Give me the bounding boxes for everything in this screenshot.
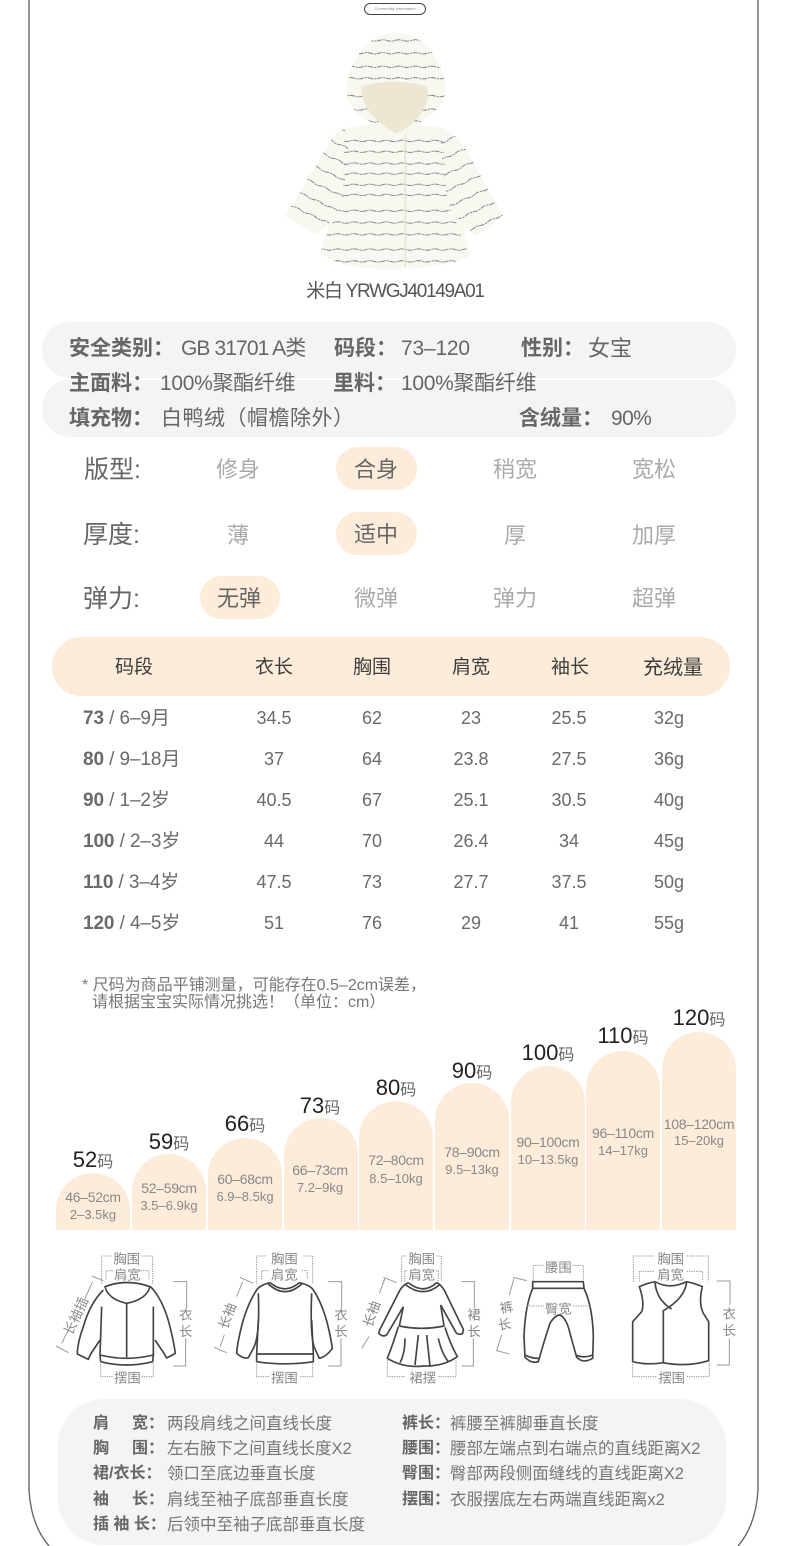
row 90: 25.1 <box>453 790 489 810</box>
arch 80 <box>359 1101 433 1230</box>
panel: measurement definitions <box>58 1399 726 1545</box>
spec: lining: 里料： <box>333 372 396 395</box>
weight 66: 6.9–8.5kg <box>216 1189 274 1204</box>
row 100: 26.4 <box>453 831 489 851</box>
diagram: dress: 肩宽 <box>408 1266 435 1282</box>
row 90: 40.5 <box>256 790 292 810</box>
diagram: pants: 腰围 <box>545 1260 572 1275</box>
table header: 袖长 <box>551 657 589 678</box>
size label 73: 73码 <box>300 1093 340 1118</box>
definition: waist: 腰部左端点到右端点的直线距离X2 <box>450 1440 700 1458</box>
diagrams: dress, pants and vest <box>360 1251 736 1385</box>
diagram: dress: 长 <box>467 1324 481 1339</box>
spec value: size range: 73–120 <box>401 337 470 360</box>
row 110: 110 / 3–4岁 <box>83 872 179 893</box>
definition: waist: 腰围： <box>402 1440 450 1457</box>
row 120: 29 <box>461 913 481 933</box>
diagram: vest: 肩宽 <box>657 1266 684 1282</box>
definition: sleeve: 肩线至袖子底部垂直长度 <box>167 1491 348 1509</box>
row 80: 36g <box>654 749 684 769</box>
diagram: hooded jacket: 长袖插 <box>61 1295 91 1337</box>
definition: chest: 胸 <box>93 1440 109 1457</box>
spec: gender: 性别： <box>521 337 584 360</box>
row 80: 80 / 9–18月 <box>83 749 180 770</box>
size label 59: 59码 <box>149 1129 189 1154</box>
diagram: dress: 裙摆 <box>409 1370 436 1385</box>
row 110: 47.5 <box>256 872 292 892</box>
size label 66: 66码 <box>225 1111 265 1136</box>
row 73: 23 <box>461 708 481 728</box>
weight 110: 14–17kg <box>598 1143 648 1158</box>
row 90: 40g <box>654 790 684 810</box>
definition: shoulder width: 肩 <box>93 1415 109 1432</box>
row 73 <box>83 708 684 729</box>
row 120: 41 <box>559 913 579 933</box>
row 80: 64 <box>362 749 382 769</box>
spec value: safety class: GB 31701 A类 <box>181 337 305 360</box>
option: 超弹 <box>632 586 676 611</box>
row 110: 37.5 <box>551 872 587 892</box>
option selected: 合身 <box>354 457 398 482</box>
spec: shell fabric: 主面料： <box>69 372 153 395</box>
row 100: 34 <box>559 831 579 851</box>
diagram: hooded jacket: 肩宽 <box>114 1266 141 1282</box>
arch 90 <box>435 1083 509 1230</box>
spec value: gender: 女宝 <box>588 336 632 361</box>
definition: shoulder width: 两段肩线之间直线长度 <box>167 1415 332 1433</box>
row 120: 120 / 4–5岁 <box>83 913 180 934</box>
option: 稍宽 <box>493 457 537 482</box>
diagram: pants <box>497 1260 593 1362</box>
weight 52: 2–3.5kg <box>70 1207 116 1222</box>
row 120 <box>83 913 684 934</box>
weight 73: 7.2–9kg <box>297 1180 343 1195</box>
spec: size range: 码段： <box>334 337 397 360</box>
table header: 码段 <box>115 657 153 678</box>
row 73: 34.5 <box>256 708 292 728</box>
arch 59 <box>132 1154 206 1230</box>
diagram: pants: 长 <box>497 1316 512 1333</box>
range 80: 72–80cm <box>368 1152 424 1168</box>
diagram: sweater: 长 <box>334 1324 348 1339</box>
diagram: sweater: 胸围 <box>271 1251 298 1266</box>
chart: size arches by height and weight <box>56 1005 736 1230</box>
highlight: fit <box>336 447 417 490</box>
arch 66 <box>208 1138 282 1230</box>
range 73: 66–73cm <box>292 1162 348 1178</box>
definition: length: 领口至底边垂直长度 <box>167 1465 316 1483</box>
diagrams: hooded jacket and sweater <box>56 1251 348 1385</box>
option: 宽松 <box>632 457 676 482</box>
panel: product specs <box>42 322 736 437</box>
size label 120: 120码 <box>673 1005 725 1030</box>
row 73: 62 <box>362 708 382 728</box>
panel: fit ratings <box>83 447 676 619</box>
product image: hooded jacket <box>286 33 503 269</box>
size label 100: 100码 <box>522 1040 574 1065</box>
arch 120 <box>662 1032 736 1230</box>
definition: sleeve <box>93 1490 348 1509</box>
row 110: 50g <box>654 872 684 892</box>
arch 52 <box>56 1173 130 1230</box>
option: 微弹 <box>354 586 398 611</box>
row background bottom <box>42 380 736 437</box>
weight 80: 8.5–10kg <box>369 1171 423 1186</box>
row 100: 100 / 2–3岁 <box>83 831 180 852</box>
highlight: thickness <box>336 512 417 555</box>
row 110: 73 <box>362 872 382 892</box>
option: 薄 <box>227 523 249 548</box>
diagram: sweater: 摆围 <box>271 1370 298 1385</box>
definition: sleeve: 长： <box>132 1491 164 1508</box>
diagram: dress: 裙 <box>467 1307 481 1322</box>
range 66: 60–68cm <box>217 1171 273 1187</box>
label: thickness: 厚度: <box>83 521 140 549</box>
option: 修身 <box>216 457 260 482</box>
table header: 胸围 <box>353 657 391 678</box>
row 80: 23.8 <box>453 749 489 769</box>
row 90: 90 / 1–2岁 <box>83 790 170 811</box>
definition: pants length: 裤长： <box>402 1415 450 1432</box>
diagram: vest: 衣 <box>723 1306 736 1321</box>
definition: chest: 左右腋下之间直线长度X2 <box>167 1440 352 1458</box>
row 110 <box>83 872 684 893</box>
row 100: 45g <box>654 831 684 851</box>
size table rows <box>83 708 684 934</box>
row 90: 67 <box>362 790 382 810</box>
definition: hem: 衣服摆底左右两端直线距离x2 <box>450 1491 665 1509</box>
measurement note: * 尺码为商品平铺测量，可能存在0.5–2cm误差， <box>82 977 426 994</box>
size label 80: 80码 <box>376 1075 416 1100</box>
definition: shoulder width <box>93 1414 332 1433</box>
row 90: 30.5 <box>551 790 587 810</box>
weight 59: 3.5–6.9kg <box>140 1198 198 1213</box>
option: 加厚 <box>632 523 676 548</box>
colour and product code: 米白 YRWGJ40149A01 <box>306 281 484 302</box>
diagram: vest: 长 <box>723 1323 736 1338</box>
row 73: 25.5 <box>551 708 587 728</box>
row 80: 27.5 <box>551 749 587 769</box>
row 120: 76 <box>362 913 382 933</box>
diagram: sweater: 长袖 <box>216 1301 239 1331</box>
diagram: pants: 臀宽 <box>545 1300 572 1316</box>
range 120: 108–120cm <box>664 1116 734 1132</box>
option: 厚 <box>504 523 526 548</box>
spec: down content: 含绒量： <box>519 407 603 430</box>
definition: hip: 臀围： <box>402 1465 450 1482</box>
diagram: hooded jacket: 长 <box>179 1324 192 1339</box>
row background top <box>42 322 736 378</box>
range 100: 90–100cm <box>517 1134 579 1150</box>
spec value: filling: 白鸭绒（帽檐除外） <box>161 407 354 430</box>
row 120: 55g <box>654 913 684 933</box>
top badge <box>364 3 426 15</box>
definition: raglan sleeve: 后领中至袖子底部垂直长度 <box>167 1516 365 1534</box>
spec value: down content: 90% <box>611 407 651 430</box>
table header: 肩宽 <box>452 657 490 678</box>
diagram: vest: 胸围 <box>657 1251 684 1266</box>
range 110: 96–110cm <box>592 1125 654 1141</box>
row 73: 32g <box>654 708 684 728</box>
definition: hip: 臀部两段侧面缝线的直线距离X2 <box>450 1465 684 1483</box>
option: 弹力 <box>493 586 537 611</box>
size label 90: 90码 <box>452 1058 492 1083</box>
table header: 衣长 <box>255 657 293 678</box>
spec value: lining: 100%聚酯纤维 <box>401 372 536 395</box>
row 100: 70 <box>362 831 382 851</box>
diagram: dress: 胸围 <box>408 1251 435 1266</box>
diagram: sweater: 衣 <box>334 1307 348 1322</box>
arch 73 <box>284 1118 358 1230</box>
range 52: 46–52cm <box>65 1189 121 1205</box>
spec value: shell fabric: 100%聚酯纤维 <box>160 372 295 395</box>
diagram: pants: 裤 <box>499 1299 514 1316</box>
definition: raglan sleeve <box>93 1515 365 1534</box>
spec: filling: 填充物： <box>69 407 153 430</box>
label: fit: 版型: <box>84 456 141 484</box>
definition: sleeve: 袖 <box>93 1491 109 1508</box>
definition: length: 裙/衣长： <box>93 1465 161 1482</box>
range 59: 52–59cm <box>141 1180 197 1196</box>
row 120: 51 <box>264 913 284 933</box>
diagram: vest <box>633 1251 736 1385</box>
label: stretch: 弹力: <box>83 585 140 613</box>
measurement note <box>82 976 426 1011</box>
definition: length <box>93 1464 316 1483</box>
row 73: 73 / 6–9月 <box>83 708 170 729</box>
top badge: Commodity information <box>374 6 416 11</box>
spec: safety class: 安全类别： <box>69 337 174 360</box>
range 90: 78–90cm <box>444 1144 500 1160</box>
row 100: 44 <box>264 831 284 851</box>
table header: 充绒量 <box>643 657 703 679</box>
definition: raglan sleeve: 插 袖 长： <box>93 1516 166 1533</box>
diagram: sweater: 肩宽 <box>271 1266 298 1282</box>
size label 110: 110码 <box>597 1023 649 1048</box>
definition: shoulder width: 宽： <box>132 1415 164 1432</box>
diagram: hooded jacket: 胸围 <box>113 1251 140 1266</box>
diagram: hooded jacket: 衣 <box>179 1307 192 1322</box>
diagram: sweater <box>214 1251 348 1385</box>
definition: chest <box>93 1439 352 1458</box>
row 100 <box>83 831 684 852</box>
option selected: 适中 <box>354 522 398 547</box>
highlight: stretch <box>200 576 280 619</box>
diagram: hooded jacket <box>56 1251 192 1385</box>
row 90 <box>83 790 684 811</box>
diagram: dress <box>360 1251 481 1385</box>
weight 120: 15–20kg <box>674 1133 724 1148</box>
table header <box>52 637 730 696</box>
definition: hem: 摆围： <box>402 1491 450 1508</box>
row 80: 37 <box>264 749 284 769</box>
diagram: vest: 摆围 <box>658 1370 685 1385</box>
measurement note: 请根据宝宝实际情况挑选！（单位：cm） <box>92 994 385 1011</box>
weight 90: 9.5–13kg <box>445 1162 499 1177</box>
row 110: 27.7 <box>453 872 489 892</box>
size label 52: 52码 <box>73 1147 113 1172</box>
arch 100 <box>511 1066 585 1230</box>
arch 110 <box>586 1051 660 1230</box>
definition: chest: 围： <box>132 1440 164 1457</box>
diagram: hooded jacket: 摆围 <box>114 1370 141 1385</box>
option selected: 无弹 <box>217 586 261 611</box>
weight 100: 10–13.5kg <box>518 1152 578 1167</box>
definition: pants length: 裤腰至裤脚垂直长度 <box>450 1415 598 1433</box>
row 80 <box>83 749 684 770</box>
diagram: dress: 长袖 <box>360 1299 383 1329</box>
